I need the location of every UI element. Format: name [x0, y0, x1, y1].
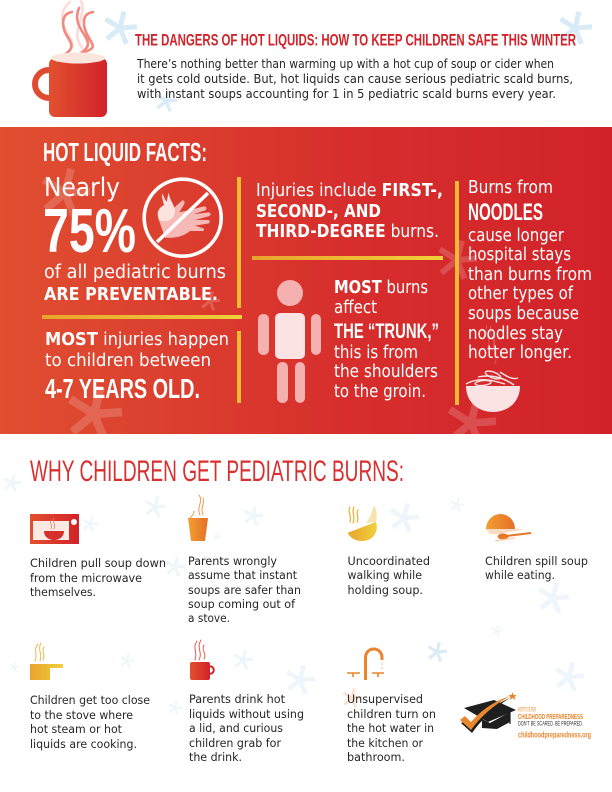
icon: no burned hand: [144, 179, 221, 256]
fact: noodle burns: other types of: [468, 284, 574, 304]
fact: trunk burns: [334, 278, 439, 402]
fact: trunk burns: MOST burns: [334, 278, 428, 298]
logo: institute for childhood preparedness: INSTITUTE FOR: [518, 708, 536, 714]
fact: trunk burns: THE “TRUNK,”: [334, 320, 439, 343]
logo: institute for childhood preparedness: [460, 692, 591, 740]
reason: parents drinking: liquids without using: [189, 707, 304, 721]
reason: microwave: themselves.: [30, 585, 96, 599]
reason: microwave: Children pull soup down: [30, 556, 166, 570]
icon: bowl and spoon: [485, 514, 531, 541]
reason: hot water: the kitchen or: [347, 736, 423, 750]
reason: parents drinking: a lid, and curious: [189, 721, 283, 735]
reason: near the stove: [30, 643, 150, 751]
reason: hot water: the hot water in: [347, 721, 434, 735]
icon: microwave: [30, 514, 79, 544]
icon: soup cup: [188, 495, 208, 541]
fact: noodle burns: soups because: [468, 304, 579, 324]
fact: injury ages: 4-7 YEARS OLD.: [45, 373, 200, 404]
reason: microwave: from the microwave: [30, 571, 142, 585]
heading: why children get pediatric burns: WHY CHILDREN GET PEDIATRIC BURNS:: [30, 455, 404, 488]
reason: microwave: [30, 514, 166, 599]
fact: injury ages: MOST injuries happen: [45, 329, 229, 350]
fact: noodle burns: NOODLES: [468, 199, 543, 226]
fact: noodle burns: noodles stay: [468, 324, 563, 344]
fact: trunk burns: affect: [334, 298, 377, 318]
fact: noodle burns: than burns from: [468, 265, 592, 285]
fact: injury ages: to children between: [45, 350, 211, 371]
panel: hot liquid facts: [0, 127, 612, 448]
reason: parents drinking: the drink.: [189, 750, 242, 764]
fact: burn degrees: THIRD-DEGREE burns.: [256, 221, 439, 242]
fact: trunk burns: this is from: [334, 343, 418, 363]
fact: trunk burns: to the groin.: [334, 382, 426, 402]
intro text: There’s nothing better than warming up with a hot cup of soup or cider when: [136, 57, 554, 71]
icon: tilted yellow bowl: [348, 505, 377, 541]
intro text: it gets cold outside. But, hot liquids can cause serious pediatric scald burns,: [137, 72, 573, 86]
stat: 75 percent preventable: [43, 173, 226, 305]
reason: parents drinking: children grab for: [189, 736, 281, 750]
reason: instant soup assumption: soup coming out of: [188, 597, 296, 611]
stat: 75 percent preventable: of all pediatric burns: [44, 262, 226, 283]
reason: near the stove: liquids are cooking.: [30, 737, 137, 751]
reason: hot water: Unsupervised: [347, 692, 423, 706]
fact: noodle burns: cause longer: [468, 226, 565, 246]
icon: small mug: [190, 640, 214, 680]
fact: trunk burns: the shoulders: [334, 362, 438, 382]
icon: child body: [258, 280, 321, 403]
heading: hot liquid facts: HOT LIQUID FACTS:: [43, 137, 207, 167]
fact: injury ages: [45, 329, 229, 404]
icon: graduation cap and check: [460, 692, 516, 733]
icon: pot with steam: [30, 643, 63, 680]
stat: 75 percent preventable: ARE PREVENTABLE.: [44, 284, 218, 305]
reason: near the stove: hot steam or hot: [30, 722, 122, 736]
fact: noodle burns: Burns from: [468, 178, 553, 198]
stat: 75 percent preventable: 75%: [43, 197, 136, 266]
icon: faucet: [347, 649, 384, 680]
reason: hot water: bathroom.: [347, 750, 405, 764]
reason: uncoordinated walking: [348, 505, 430, 597]
fact: noodle burns: hospital stays: [468, 245, 571, 265]
reason: instant soup assumption: soups are safer than: [188, 583, 301, 597]
reason: instant soup assumption: a stove.: [188, 611, 230, 625]
dividers: [42, 177, 459, 405]
reason: near the stove: Children get too close: [30, 693, 150, 707]
stat: 75 percent preventable: Nearly: [44, 173, 120, 203]
reason: parents drinking: Parents drink hot: [189, 692, 285, 706]
icon: steaming red mug: [35, 0, 107, 117]
reason: instant soup assumption: [188, 495, 301, 625]
reason: instant soup assumption: Parents wrongly: [188, 554, 277, 568]
reason: spilling while eating: while eating.: [485, 568, 555, 582]
reason: spilling while eating: [485, 514, 588, 582]
fact: noodle burns: [468, 178, 592, 363]
intro text: [136, 57, 573, 101]
reason: hot water: children turn on: [347, 707, 436, 721]
intro text: with instant soups accounting for 1 in 5 pediatric scald burns every year.: [137, 87, 556, 101]
reason: uncoordinated walking: Uncoordinated: [348, 554, 430, 568]
reason: spilling while eating: Children spill soup: [485, 554, 588, 568]
fact: burn degrees: SECOND-, AND: [256, 201, 381, 222]
reason: uncoordinated walking: walking while: [348, 568, 422, 582]
fact: burn degrees: [256, 180, 443, 242]
reason: hot water: [347, 649, 436, 764]
reason: near the stove: to the stove where: [30, 708, 133, 722]
fact: noodle burns: hotter longer.: [468, 343, 572, 363]
fact: burn degrees: Injuries include FIRST-,: [256, 180, 443, 201]
reason: uncoordinated walking: holding soup.: [348, 583, 423, 597]
icon: noodle bowl: [466, 326, 520, 412]
reason: instant soup assumption: assume that instant: [188, 568, 297, 582]
reason: parents drinking: [189, 640, 304, 764]
